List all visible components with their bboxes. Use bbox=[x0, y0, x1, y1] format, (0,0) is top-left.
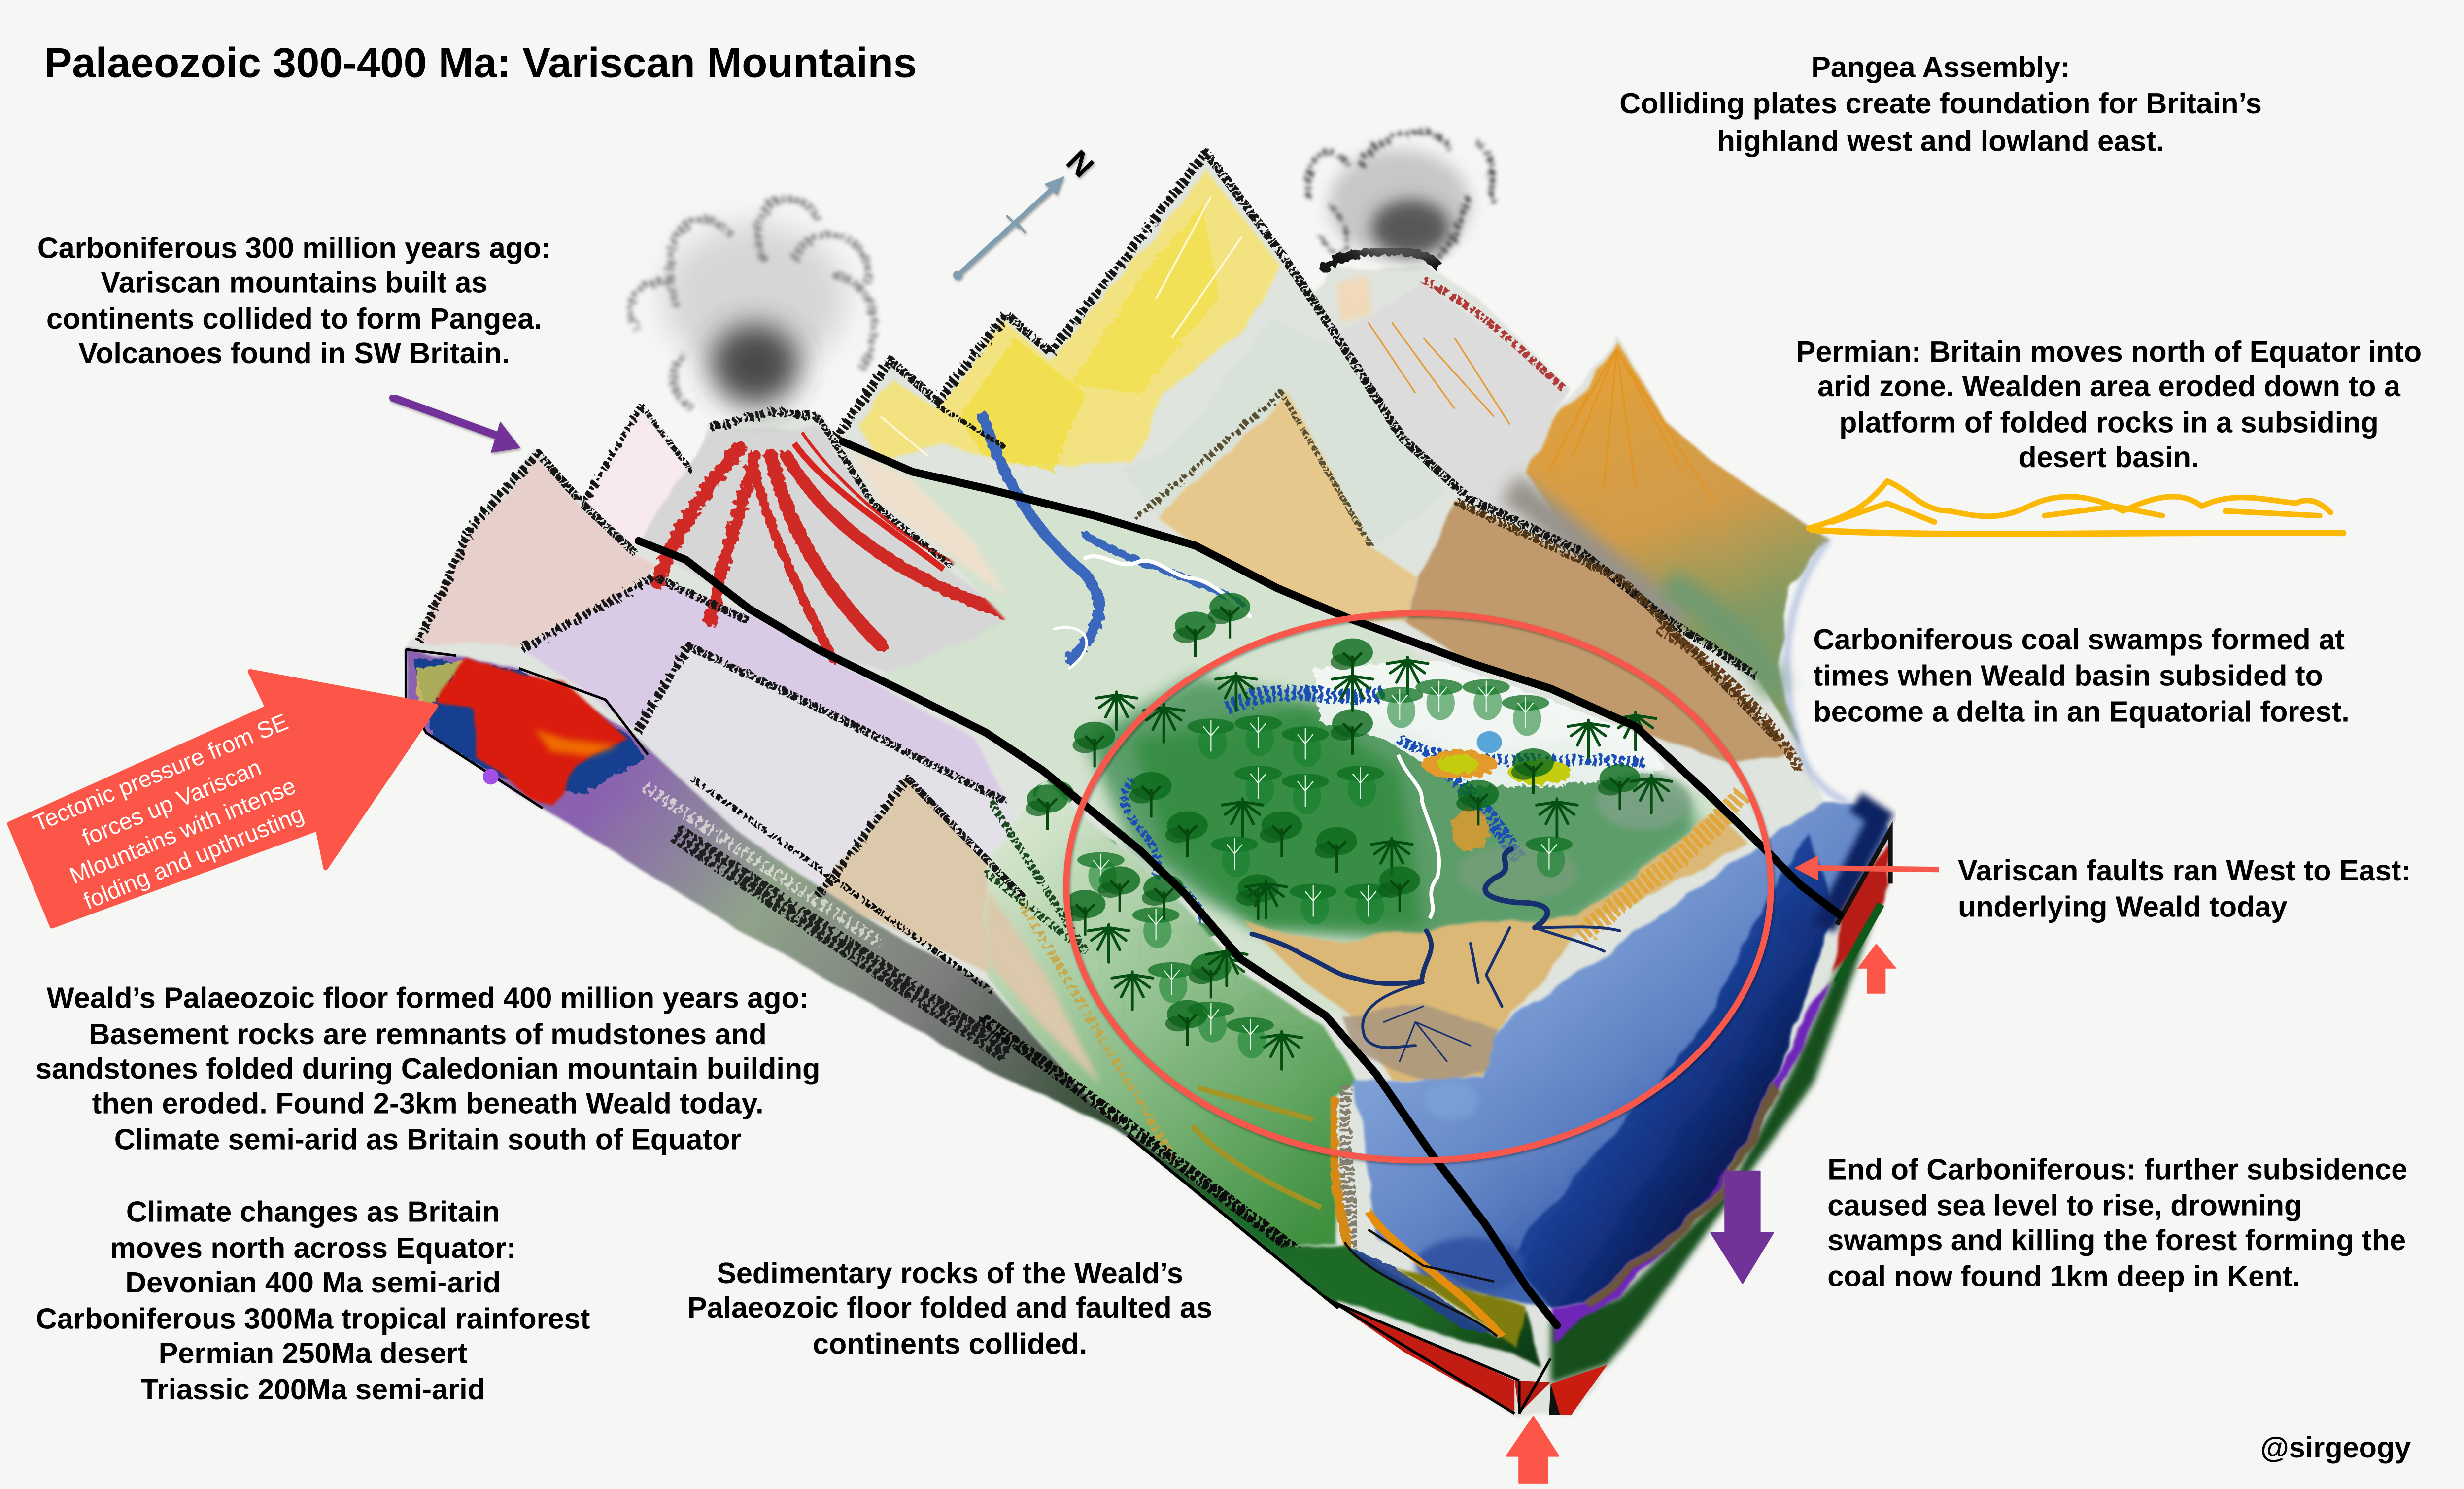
text: climate changes: Climate changes as Britain bbox=[126, 1195, 500, 1228]
right face strata bbox=[1549, 830, 1890, 1415]
arrow caption: tectonic pressure: Tectonic pressure from SE bbox=[30, 709, 292, 837]
arrow: compression from south bbox=[1506, 1417, 1559, 1483]
text: Carboniferous volcanoes: Volcanoes found in SW Britain. bbox=[78, 337, 510, 370]
white meander rivers bbox=[1054, 556, 1250, 668]
text: Permian: Permian: Britain moves north of Equator into bbox=[1796, 335, 2422, 368]
mountain: beige bbox=[818, 778, 1038, 987]
text: climate changes: Permian 250Ma desert bbox=[159, 1337, 468, 1370]
river courses with blue stipple bbox=[983, 417, 1242, 660]
volcano smoke: east bbox=[1308, 132, 1494, 260]
text: Variscan faults: underlying Weald today bbox=[1958, 890, 2287, 923]
icon: north compass arrow bbox=[953, 143, 1101, 280]
volcano smoke: west bbox=[631, 199, 874, 409]
volcano cone: east bbox=[1321, 250, 1565, 425]
arrow caption: tectonic pressure: folding and upthrusting bbox=[80, 801, 308, 914]
arrow: tectonic pressure bbox=[0, 0, 436, 926]
mountain: orange bbox=[1510, 343, 1829, 747]
text: Carboniferous volcanoes: Variscan mountains built as bbox=[101, 266, 487, 299]
forest ground bbox=[1085, 660, 1699, 944]
text: Carboniferous volcanoes: continents collided to form Pangea. bbox=[46, 302, 542, 335]
text: end of Carboniferous: caused sea level to rise, drowning bbox=[1827, 1189, 2302, 1222]
text: Palaeozoic floor: Basement rocks are remnants of mudstones and bbox=[89, 1017, 767, 1050]
text: Pangea assembly: Pangea Assembly: bbox=[1811, 50, 2070, 83]
text: Permian: platform of folded rocks in a subsiding bbox=[1839, 406, 2379, 439]
mountain: lilac bbox=[522, 577, 1006, 802]
east shore speckle bbox=[1659, 629, 1801, 771]
red ring highlighting coal swamps bbox=[1066, 613, 1771, 1160]
arrow: subsidence down bbox=[1711, 1171, 1773, 1283]
title: Palaeozoic 300-400 Ma: Variscan Mountains bbox=[44, 39, 917, 86]
front face strata bbox=[1282, 1211, 1551, 1414]
mountain: brown bbox=[1403, 502, 1794, 763]
gold shore bbox=[1332, 1097, 1349, 1250]
mountain ridge crests bbox=[418, 153, 1777, 896]
coast edge wash bbox=[1787, 540, 1848, 802]
mountain: yellow folded range bbox=[857, 170, 1282, 472]
speckled west shore bbox=[1341, 1085, 1356, 1250]
sandy patch below volcano bbox=[849, 448, 1006, 598]
sea bbox=[1354, 800, 1892, 1307]
arrow: fault pointer bbox=[1794, 855, 1939, 880]
text: Permian: arid zone. Wealden area eroded down to a bbox=[1817, 370, 2401, 403]
volcano cone: red, west bbox=[639, 425, 1013, 692]
text: coal swamps: become a delta in an Equatorial forest. bbox=[1814, 695, 2350, 728]
delta distributaries bbox=[1252, 849, 1620, 1061]
text: climate changes: moves north across Equator: bbox=[110, 1231, 516, 1264]
forest trees bbox=[1032, 593, 1672, 1060]
text: coal swamps: Carboniferous coal swamps formed at bbox=[1814, 623, 2345, 656]
text: end of Carboniferous: swamps and killing the forest forming the bbox=[1827, 1223, 2406, 1256]
text: Palaeozoic floor: Climate semi-arid as Britain south of Equator bbox=[114, 1123, 742, 1156]
mountain: pink bbox=[418, 459, 660, 644]
coastal sand speckle bbox=[1580, 794, 1743, 936]
text: climate changes: Carboniferous 300Ma tropical rainforest bbox=[36, 1302, 590, 1335]
landscape block diagram bbox=[406, 132, 1892, 1415]
text: sedimentary rocks: Palaeozoic floor folded and faulted as bbox=[687, 1291, 1212, 1324]
delta lobe bbox=[1341, 1003, 1500, 1085]
sandy delta plain bbox=[1246, 812, 1749, 1082]
text: climate changes: Devonian 400 Ma semi-arid bbox=[125, 1266, 501, 1299]
credit: @sirgeogy bbox=[2260, 1431, 2411, 1464]
arrow caption: tectonic pressure bbox=[30, 709, 308, 914]
arrow: small compression up bbox=[1857, 944, 1897, 994]
icon: Permian desert sketch bbox=[1809, 481, 2343, 534]
text: Variscan faults: Variscan faults ran West to East: bbox=[1958, 854, 2411, 887]
text: end of Carboniferous: End of Carboniferous: further subsidence bbox=[1827, 1152, 2407, 1185]
text: Palaeozoic floor: Weald’s Palaeozoic floor formed 400 million years ago: bbox=[47, 981, 809, 1015]
text: Palaeozoic floor: then eroded. Found 2-3km beneath Weald today. bbox=[92, 1086, 764, 1119]
text: Carboniferous volcanoes: Carboniferous 300 million years ago: bbox=[37, 231, 551, 264]
white river through forest bbox=[1398, 755, 1439, 918]
green plain bbox=[986, 778, 1359, 1249]
text: coal swamps: times when Weald basin subsided to bbox=[1814, 659, 2323, 692]
text: end of Carboniferous: coal now found 1km deep in Kent. bbox=[1827, 1259, 2300, 1292]
text: sedimentary rocks: Sedimentary rocks of the Weald’s bbox=[717, 1256, 1183, 1289]
beige base band bbox=[986, 888, 1101, 1085]
land base bbox=[406, 153, 1887, 1415]
text: Permian: desert basin. bbox=[2019, 440, 2199, 474]
fault line: south bbox=[639, 541, 1557, 1325]
text: Pangea assembly: Colliding plates create foundation for Britain’s bbox=[1619, 87, 2262, 120]
fault line: north bbox=[843, 442, 1840, 915]
arrow caption: tectonic pressure: Mlountains with intense bbox=[66, 773, 300, 889]
mountain: tan bbox=[1156, 393, 1420, 626]
arrow caption: tectonic pressure: forces up Variscan bbox=[78, 754, 265, 851]
text: Pangea assembly: highland west and lowland east. bbox=[1717, 124, 2164, 157]
text: Palaeozoic floor: sandstones folded during Caledonian mountain building bbox=[35, 1052, 820, 1085]
mountain: pale green grey bbox=[1125, 318, 1447, 547]
mountain: grey slope bbox=[1337, 283, 1579, 550]
red folded rocks at corner bbox=[406, 649, 648, 808]
icon: north compass arrow: N bbox=[1060, 143, 1101, 184]
text: climate changes: Triassic 200Ma semi-arid bbox=[141, 1373, 485, 1406]
central plain bbox=[843, 442, 1749, 1015]
arrow: purple pointing at mountains bbox=[393, 398, 520, 453]
text: sedimentary rocks: continents collided. bbox=[813, 1327, 1087, 1360]
mountain: pale pink bbox=[585, 412, 692, 544]
forest on green plain bbox=[986, 784, 1321, 1208]
left side strata strip bbox=[406, 648, 1338, 1308]
mountain: pale grey lilac bbox=[637, 646, 1022, 896]
